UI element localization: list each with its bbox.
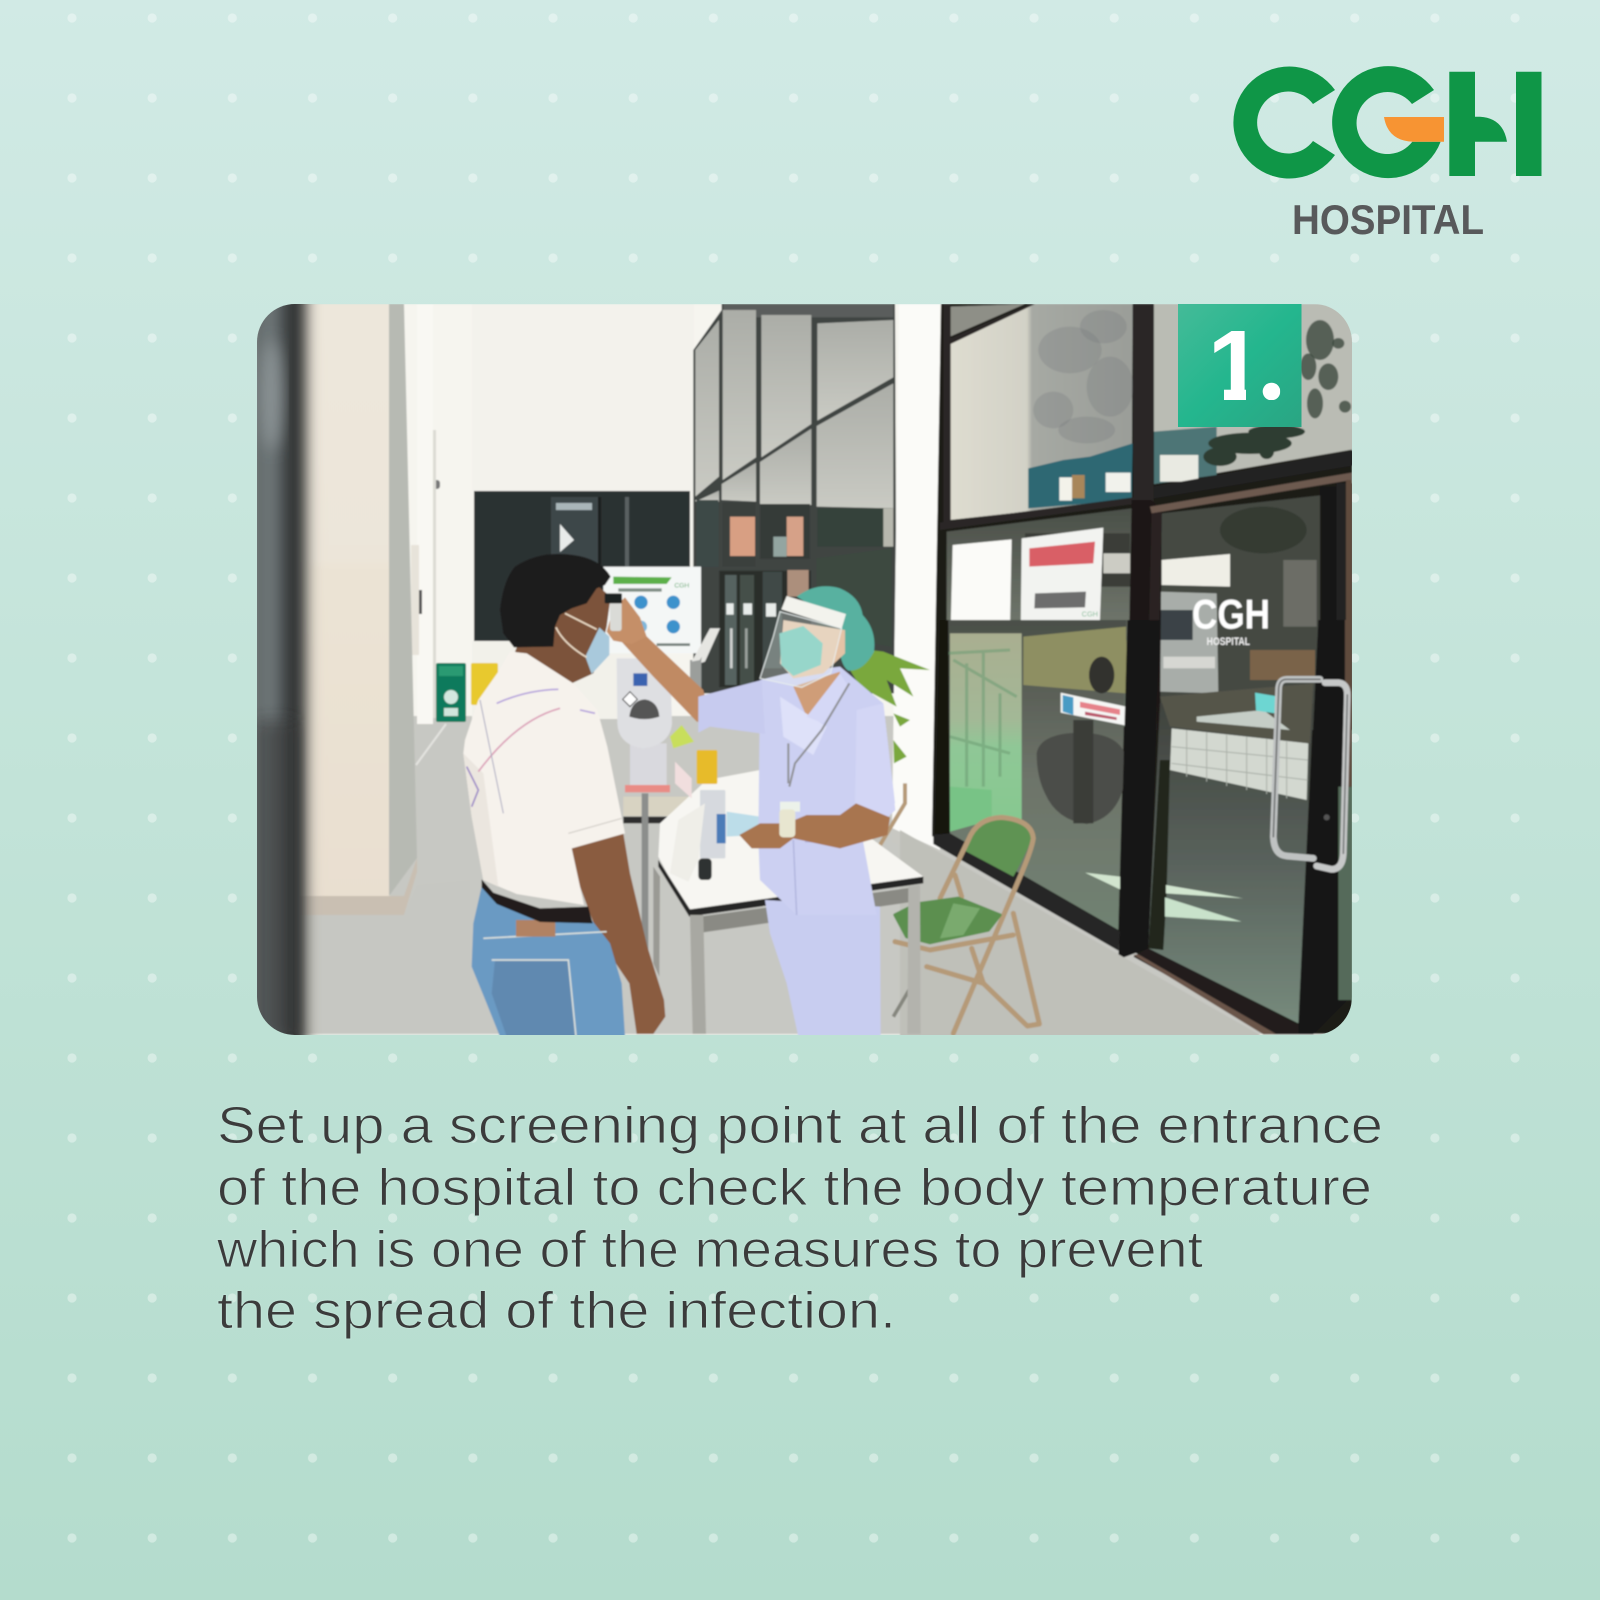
floor seam (416, 724, 446, 765)
nurse collar (780, 697, 827, 755)
pane upper left (950, 304, 1133, 520)
small black device (698, 858, 712, 880)
chair frame (895, 817, 1039, 1033)
door sticker no-entry (1061, 693, 1126, 725)
man hair (500, 554, 611, 647)
nurse tunic (758, 667, 895, 915)
base rail door (1133, 948, 1298, 1034)
nurse cap (797, 586, 874, 671)
green basket (670, 725, 694, 748)
dark window at back wall (474, 491, 690, 641)
face shield (760, 612, 842, 687)
sidewalk floor overlay (900, 830, 1262, 1036)
line 1: Set up a screening point at all of the entrance (217, 1097, 1383, 1155)
hand sanitizer dispenser (617, 658, 672, 792)
pane teal strip (1028, 443, 1133, 508)
reflected planter pot (1037, 720, 1127, 824)
reflected sunlight patches (1085, 873, 1120, 889)
logo letter C (1233, 66, 1335, 178)
jeans leather patch (516, 920, 555, 937)
tree foliage reflection (1203, 425, 1305, 466)
pillar front (300, 304, 390, 896)
door logo CGH: CGH (1192, 591, 1270, 638)
line 3: which is one of the measures to prevent (216, 1221, 1204, 1279)
left frame post (935, 620, 950, 837)
grey box with photo (700, 790, 726, 858)
plant behind nurse (850, 650, 930, 763)
facade lower dark panes (696, 499, 720, 503)
lectern and glass door rail (692, 628, 720, 662)
upper wall shading (472, 304, 694, 491)
rear chair frame (880, 783, 905, 845)
door right stile lower (1298, 620, 1351, 1034)
door glass lower (1148, 703, 1313, 1023)
door glass (1160, 495, 1323, 730)
pane top sliver (950, 304, 1025, 337)
column base shading (891, 828, 940, 852)
nurse hand (607, 597, 647, 644)
lower left pane (947, 620, 1127, 930)
left pillar (300, 304, 417, 915)
dispenser stand pole (642, 793, 648, 980)
upper right panes (940, 304, 1353, 730)
facade upper panes (695, 310, 893, 508)
frame center post (1118, 620, 1160, 959)
lower pane reflection (1025, 533, 1130, 587)
pane right teal strip (1154, 427, 1217, 484)
back wall lower (472, 716, 618, 720)
floor (390, 716, 1262, 1034)
pillar side (389, 304, 417, 896)
security camera (435, 479, 441, 490)
tunic pocket line (793, 840, 862, 915)
facade top band (723, 304, 893, 317)
nurse raised forearm (620, 620, 712, 724)
phone (727, 812, 760, 837)
corridor opening (418, 589, 423, 615)
dark reflection door (1148, 760, 1170, 950)
lower pane left (947, 508, 1132, 727)
transom bars (940, 497, 1133, 530)
folding chair (893, 817, 1039, 1033)
pillar base (310, 862, 417, 915)
nurse id badge (780, 802, 800, 812)
van reflection lower (1023, 627, 1126, 693)
post body (250, 290, 322, 1050)
mask strap (556, 613, 597, 657)
nurse: staff taking temperature (620, 586, 895, 1037)
nurse lanyard (788, 683, 849, 787)
white window poster (951, 539, 1012, 630)
logo orange accent (1384, 117, 1444, 142)
table legs (690, 915, 706, 1034)
rear table (623, 797, 690, 816)
right building facade frame (932, 304, 1352, 1034)
door reflection bench (1250, 650, 1315, 680)
chair rear leg grey (893, 980, 915, 1017)
jeans shading (492, 960, 575, 1037)
poster: hygiene guide (603, 567, 701, 653)
yellow waste bin (471, 663, 498, 705)
logo wordmark: HOSPITAL (1292, 196, 1484, 243)
shield headband (781, 596, 846, 629)
warning poster: CGH (1082, 610, 1098, 619)
reflected tile wall (1170, 728, 1308, 800)
body text (216, 1097, 1383, 1340)
logo letter H (1449, 72, 1542, 176)
nurse neck (793, 672, 840, 717)
man left arm (572, 833, 665, 1034)
reflected tree texture left pane (1033, 310, 1133, 443)
man jeans (472, 887, 625, 1037)
green plant reflection (950, 633, 1022, 823)
door top brown frame (1150, 473, 1352, 513)
nurse sleeve (698, 680, 765, 734)
nurse lower forearm and hand (739, 803, 890, 848)
door lock (1324, 814, 1330, 820)
door reflection van (1159, 592, 1218, 693)
center post upper (1127, 500, 1162, 730)
man neck and face (515, 585, 611, 683)
nurse right sleeve (855, 703, 895, 818)
nurse surgical mask (779, 626, 823, 676)
logo letter G (1332, 66, 1441, 178)
shirt stripes (467, 689, 595, 813)
badge full stop: . (1254, 288, 1289, 427)
logo: CGH Hospital (1233, 66, 1542, 243)
nurse face (780, 620, 845, 678)
post highlights (260, 340, 284, 450)
line 2: of the hospital to check the body temperature (217, 1159, 1372, 1217)
green waste bin (436, 663, 466, 722)
facade base (693, 304, 897, 693)
lower right facade (933, 620, 1352, 1034)
bamboo stems (947, 650, 1017, 787)
pane white boxes (1059, 477, 1072, 501)
man belt (482, 879, 593, 923)
table top (658, 770, 923, 917)
facade lobby doors (719, 570, 811, 687)
photo backdrop: white walls (257, 304, 1352, 1035)
line 4: the spread of the infection. (217, 1282, 896, 1340)
wristwatch (779, 809, 795, 837)
man: visitor (463, 554, 665, 1037)
man white polo shirt (463, 652, 625, 905)
door reflection white panel (1162, 554, 1230, 587)
white column (892, 304, 940, 852)
vertical mullions (943, 304, 951, 524)
jeans stitching (483, 932, 607, 1037)
badge digit: 1 (1208, 310, 1263, 422)
infrared thermometer (605, 593, 622, 631)
far corridor column (416, 479, 434, 725)
man face mask (585, 627, 609, 674)
van reflection (1025, 640, 1127, 693)
table edge (658, 860, 923, 917)
door logo CGH: HOSPITAL (1207, 636, 1250, 648)
teal door sticker (1255, 693, 1275, 713)
door left frame inner (1147, 512, 1162, 730)
dark band above tiles (1160, 683, 1313, 743)
lectern stand (700, 628, 720, 663)
door right stile (1320, 487, 1337, 730)
base rail left (933, 833, 1120, 951)
pane upper right (1154, 304, 1353, 484)
floor left strip (300, 880, 470, 1034)
nurse pants (765, 900, 881, 1037)
door handle (1273, 679, 1347, 869)
number badge 1 (1178, 288, 1302, 427)
yellow tumbler (697, 750, 717, 784)
sleeve hem (568, 818, 622, 833)
glass building facade (690, 304, 897, 693)
warning poster (1021, 528, 1103, 636)
poster: hygiene guide: CGH (674, 582, 689, 589)
door reflection tree (1220, 507, 1307, 553)
photo: temperature screening at hospital entrance (250, 290, 1353, 1050)
post lower shadow (255, 720, 297, 1040)
chair seat (895, 898, 1000, 943)
chair backrest (963, 818, 1032, 877)
pink table sign (675, 762, 692, 798)
shirt side shading (463, 753, 498, 887)
people and screening table (463, 554, 930, 1037)
table apron (700, 887, 913, 933)
blurred foreground post (250, 290, 322, 1050)
brochure stack (670, 803, 705, 882)
